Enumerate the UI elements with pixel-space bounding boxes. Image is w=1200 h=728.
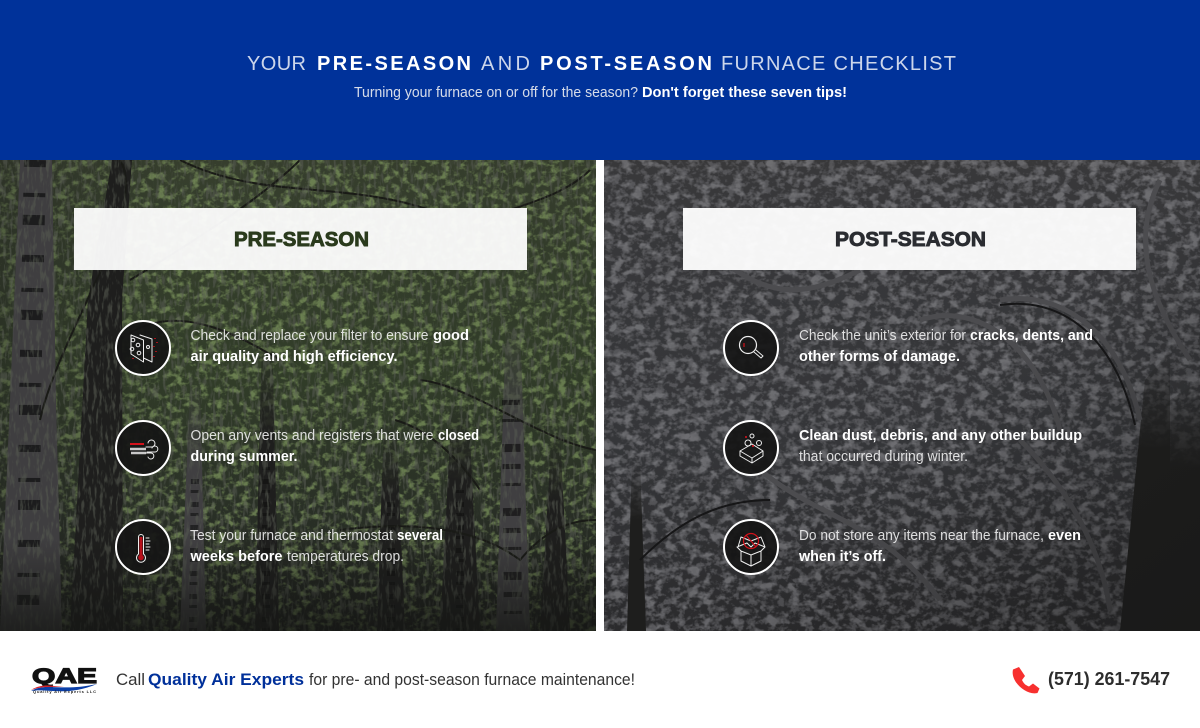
pre-season heading: [74, 208, 527, 270]
subtitle: Turning your furnace on or off for the season?: [354, 84, 638, 101]
logo: Quality Air Experts LLC: [33, 689, 96, 694]
icon: air filter: [116, 321, 170, 375]
tip text: [799, 327, 1093, 365]
tip text: even: [1048, 527, 1081, 544]
tip: clean dust: [724, 421, 1082, 475]
tip text: cracks, dents, and: [970, 327, 1093, 344]
tip text: Check and replace your filter to ensure: [190, 327, 428, 344]
subtitle: [354, 84, 847, 101]
pre-season heading: PRE-SEASON: [234, 229, 369, 251]
icon: phone: [1013, 667, 1040, 693]
panel: post-season: [604, 160, 1200, 631]
footer call to action: [116, 670, 635, 689]
tip text: several: [397, 527, 443, 544]
header banner: [0, 0, 1200, 160]
tip: check exterior: [724, 321, 1093, 375]
tip text: temperatures drop.: [287, 548, 404, 565]
logo: [31, 665, 97, 694]
title: [247, 53, 956, 75]
white centre divider: [596, 160, 604, 631]
tip: open vents: [116, 421, 479, 475]
icon: box with prohibition sign: [724, 520, 778, 574]
phone number: (571) 261-7547: [1048, 669, 1170, 689]
tip text: [799, 427, 1082, 465]
tip text: [190, 527, 443, 565]
tip text: other forms of damage.: [799, 348, 960, 365]
title: POST-SEASON: [540, 53, 712, 75]
tip text: good: [433, 327, 469, 344]
icon: thermometer: [116, 520, 170, 574]
tip text: closed: [438, 427, 479, 444]
tip text: [798, 527, 1081, 565]
tip text: that occurred during winter.: [799, 448, 968, 465]
footer: [0, 631, 1200, 728]
tip: replace filter: [116, 321, 469, 375]
footer call to action: for pre- and post-season furnace maintenance!: [309, 670, 635, 689]
footer call to action: Call: [116, 670, 145, 689]
title: FURNACE CHECKLIST: [721, 53, 956, 75]
tip text: Check the unit’s exterior for: [799, 327, 966, 344]
tip text: [190, 427, 479, 465]
title: AND: [481, 53, 530, 75]
tip: test thermostat: [116, 520, 443, 574]
tip text: Open any vents and registers that were: [190, 427, 434, 444]
forest background: [0, 160, 596, 631]
icon: soap and bubbles: [724, 421, 778, 475]
panel: pre-season: [0, 160, 596, 631]
tip text: air quality and high efficiency.: [190, 348, 398, 365]
tip text: weeks before: [190, 548, 282, 565]
post-season heading: [683, 208, 1136, 270]
snowy forest background: [604, 160, 1200, 631]
title: YOUR: [247, 53, 306, 75]
tip text: when it’s off.: [798, 548, 886, 565]
icon: air flow: [116, 421, 170, 475]
tip: do not store items: [724, 520, 1081, 574]
tip text: during summer.: [190, 448, 298, 465]
tip text: [190, 327, 469, 365]
subtitle: Don't forget these seven tips!: [642, 84, 847, 101]
tip text: Clean dust, debris, and any other buildup: [799, 427, 1082, 444]
icon: magnifying glass: [724, 321, 778, 375]
logo: QAE: [32, 665, 97, 688]
tip text: Do not store any items near the furnace,: [799, 527, 1044, 544]
title: PRE-SEASON: [317, 53, 471, 75]
footer call to action: Quality Air Experts: [148, 670, 304, 689]
post-season heading: POST-SEASON: [835, 229, 986, 251]
tip text: Test your furnace and thermostat: [190, 527, 394, 544]
